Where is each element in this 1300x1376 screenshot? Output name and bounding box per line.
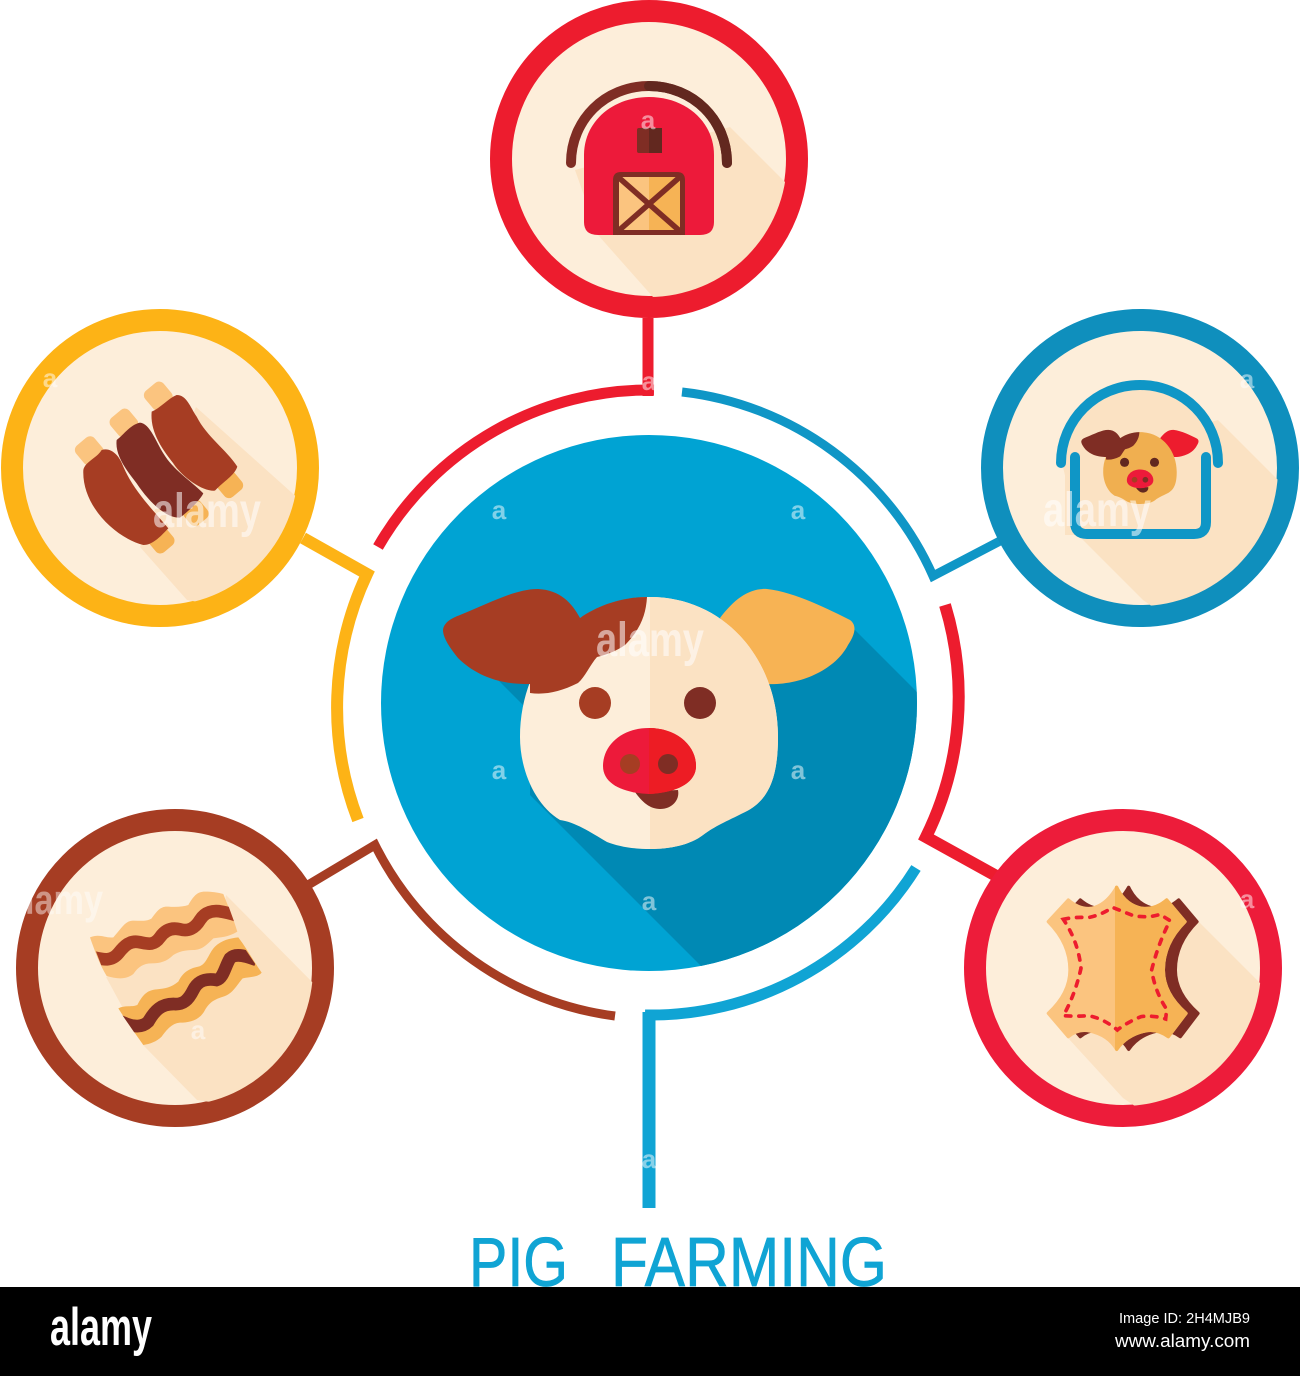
pig head [520,597,778,849]
pen fence [1075,457,1206,534]
watermarks: a [791,495,806,525]
watermarks: lamy [25,876,104,923]
watermarks: a [1240,364,1255,394]
watermarks: a [492,755,507,785]
connector ring: yellow arc with link to ribs [303,538,367,820]
pig tongue [635,790,678,809]
badge: pig in pen [992,320,1300,640]
barn roof arch [571,86,727,163]
watermarks: alamy [1043,484,1151,537]
barn body [584,97,714,235]
badge: barn [490,0,808,318]
pen arch [1061,385,1218,463]
website: www.alamy.com [1114,1331,1250,1351]
connector ring: blue arc with link to pen [682,392,1000,576]
bacon strips [87,892,262,1045]
hide and stitching [1048,887,1198,1049]
title: PIG [469,1223,568,1301]
watermarks: a [641,105,656,135]
pig eyes [579,687,716,719]
pig snout [603,728,696,794]
rib bones and meat [72,379,246,556]
footer bar [0,1287,1300,1376]
watermarks: a [642,1144,657,1174]
watermarks: a [43,363,58,393]
connector ring: red arc with link to barn [378,318,654,547]
watermarks: a [642,366,657,396]
watermarks: a [642,886,657,916]
pig right ear [720,589,854,684]
watermarks: alamy [153,485,261,538]
badge: ribs [12,320,308,620]
footer logo: alamy [50,1298,152,1357]
watermarks: alamy [596,614,704,667]
badge: leather hide [975,820,1300,1150]
small pig [1081,430,1199,504]
pig left ear and patch [443,589,647,694]
central pig badge [381,435,917,971]
connector ring: brown arc with link to bacon [308,845,615,1016]
title: FARMING [611,1223,887,1301]
watermarks: a [791,755,806,785]
connector ring: red arc with link to leather [926,605,1000,878]
barn window [637,128,662,153]
badge: bacon [27,820,330,1120]
barn door [613,172,685,235]
connector ring: light blue arc with link to title [645,868,916,1208]
watermarks: a [492,495,507,525]
image id: Image ID: 2H4MJB9 [1119,1310,1250,1327]
watermarks: a [1240,884,1255,914]
watermarks: a [191,1015,206,1045]
watermarks [25,105,1255,1174]
